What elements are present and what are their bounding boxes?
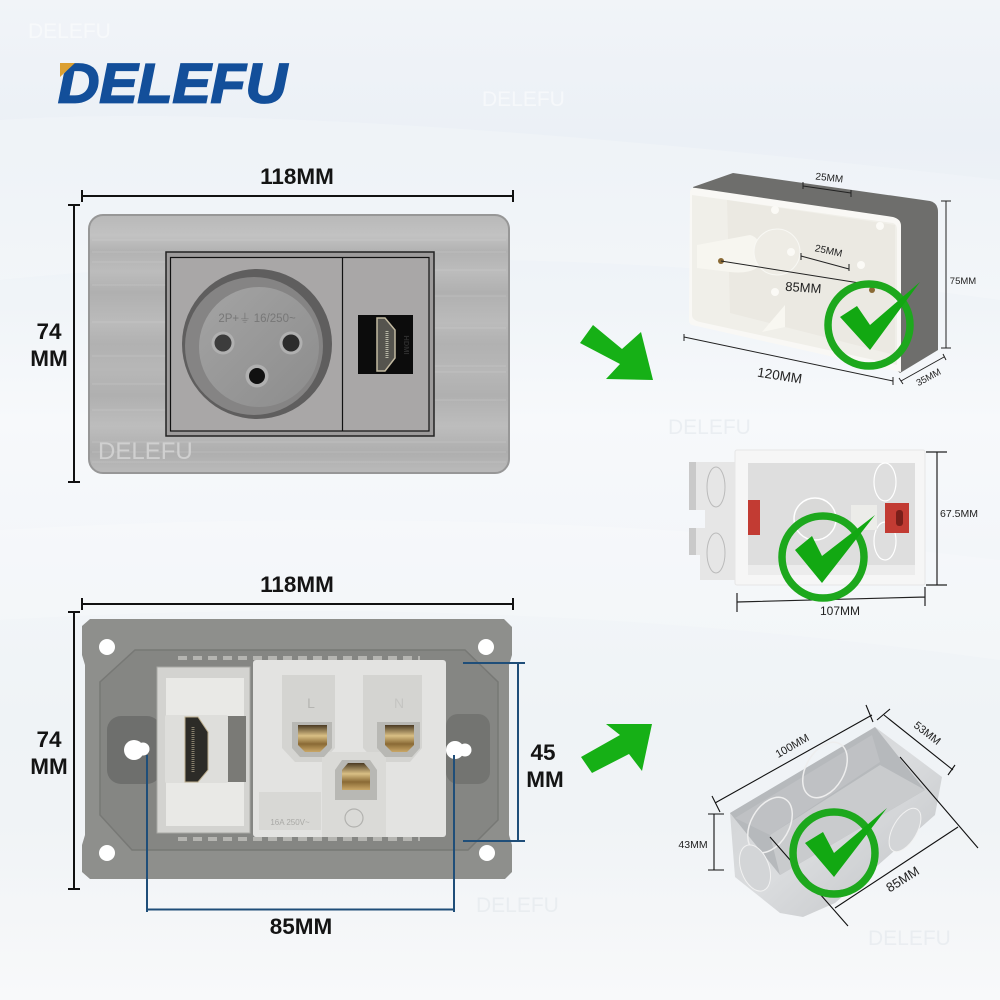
dimension: bottom plate width — [82, 572, 513, 610]
brushed lines — [92, 240, 506, 462]
dimension: top plate height — [30, 205, 80, 482]
dimension labels: metal box: 100MM — [774, 732, 811, 761]
panel: front plate with socket and HDMI — [89, 215, 509, 473]
dimension: bottom plate height — [30, 612, 80, 889]
arrow: to top box — [580, 325, 653, 380]
dimension labels: red mount box: 107MM — [820, 604, 860, 618]
dimension: bottom plate width: 118MM — [260, 572, 334, 597]
dimension labels: plastic box: 25MM — [815, 172, 844, 185]
watermarks: DELEFU — [476, 894, 559, 917]
HDMI port: HDMI — [402, 335, 411, 355]
left keyhole mount — [107, 716, 161, 784]
panel: back of socket — [82, 619, 512, 879]
dimension: top plate width — [82, 164, 513, 202]
round socket: 2P+⏚ 16/250~ — [218, 312, 296, 325]
HDMI port — [358, 315, 413, 374]
dimension labels: metal box: 43MM — [678, 839, 708, 851]
contact row — [178, 658, 420, 839]
panel: 120mm plastic box — [684, 172, 976, 389]
dimension: bottom plate height: MM — [30, 754, 68, 779]
frame — [166, 252, 434, 436]
dimension labels: metal box: 85MM — [883, 863, 922, 895]
dimension labels: plastic box: 25MM — [814, 243, 843, 260]
dimension: 45MM module height: MM — [526, 767, 564, 792]
arrow: to bottom box — [581, 724, 652, 773]
dimension labels: metal box — [678, 719, 943, 895]
dimension labels: plastic box: 120MM — [756, 365, 803, 386]
check badge: top box — [828, 282, 920, 366]
socket body: N — [394, 695, 404, 711]
watermarks: DELEFU — [668, 416, 751, 439]
watermarks: DELEFU — [28, 20, 111, 43]
dimension: top plate width: 118MM — [260, 164, 334, 189]
HDMI module — [157, 667, 250, 833]
socket body: 16A 250V~ — [270, 818, 310, 827]
logo: DELEFU: DELEFU — [58, 52, 289, 114]
dimension lines: plastic box — [684, 182, 951, 385]
watermarks: DELEFU — [482, 88, 565, 111]
dimension labels: plastic box: 85MM — [785, 279, 822, 296]
panel: metal box — [678, 705, 978, 926]
dimension labels: plastic box: 35MM — [915, 367, 943, 389]
dimension lines: metal box — [708, 705, 978, 926]
dimension: top plate height: MM — [30, 346, 68, 371]
recessed plate outline — [100, 650, 498, 850]
check badge: middle box — [782, 515, 875, 598]
dimension: bottom plate height: 74 — [36, 727, 62, 752]
soft white background band — [0, 116, 1000, 660]
dimension labels: red mount box: 67.5MM — [940, 508, 978, 520]
watermarks: DELEFU — [868, 927, 951, 950]
dimension: 85MM mounting spacing: 85MM — [270, 914, 332, 939]
module faces — [170, 257, 429, 431]
dimension: top plate height: 74 — [36, 319, 62, 344]
dimension labels: plastic box: 75MM — [950, 276, 976, 287]
socket body: L — [307, 695, 315, 711]
round socket — [182, 269, 332, 419]
dimension labels: metal box: 53MM — [911, 719, 943, 748]
dimension lines: red mount box — [737, 452, 947, 612]
socket body — [253, 660, 446, 837]
dimension: 85MM mounting spacing — [146, 755, 455, 939]
dimension labels: plastic box — [756, 172, 976, 389]
dimension: 45MM module height: 45 — [530, 740, 556, 765]
plate watermark: DELEFU — [98, 438, 193, 465]
dimension: 45MM module height — [463, 663, 564, 841]
right keyhole mount — [446, 714, 490, 784]
check badge: bottom box — [793, 808, 887, 894]
mounting holes — [99, 639, 495, 861]
dimension labels: red mount box — [820, 508, 978, 618]
panel: 107mm box with red mounts — [689, 450, 978, 618]
